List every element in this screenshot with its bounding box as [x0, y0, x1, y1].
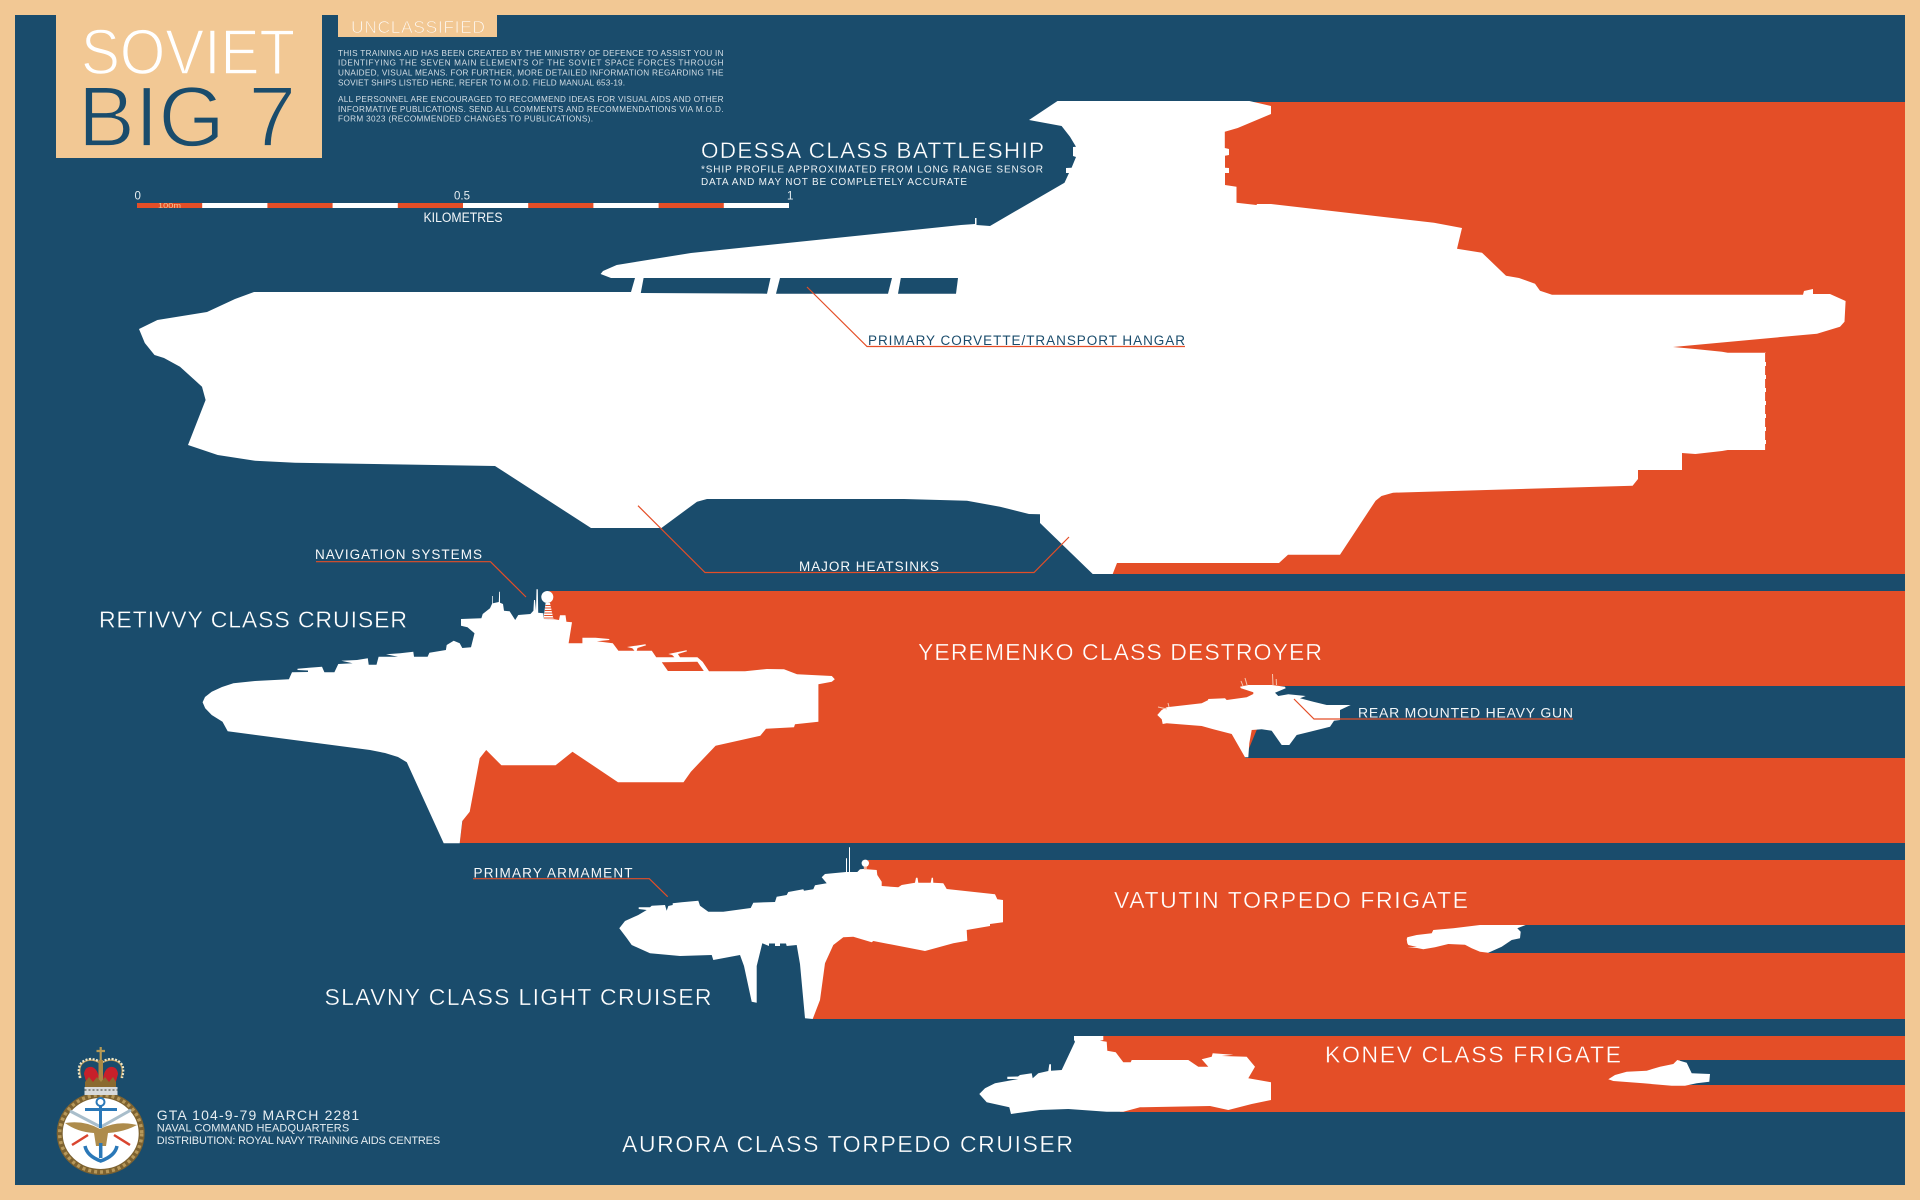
icon: defence crest	[60, 1047, 142, 1172]
text block: intro: UNAIDED, VISUAL MEANS. FOR FURTHER, MORE DETAILED INFORMATION REGARDING THE	[338, 68, 724, 78]
heading: Odessa class battleship: ODESSA CLASS BATTLESHIP	[701, 138, 1044, 163]
ship: Yeremenko class destroyer	[1157, 674, 1351, 757]
text block: document reference: NAVAL COMMAND HEADQUARTERS	[157, 1123, 349, 1135]
callout: primary corvette/transport hangar	[807, 287, 1185, 348]
callout: primary corvette/transport hangar: PRIMARY CORVETTE/TRANSPORT HANGAR	[868, 333, 1185, 348]
callout: primary armament	[473, 866, 668, 897]
panel: navy stripe Yeremenko	[1245, 686, 1905, 758]
heading: Odessa class battleship	[701, 138, 1044, 188]
scale bar: 0.5	[454, 190, 470, 202]
text block: document reference: GTA 104-9-79 MARCH 2281	[157, 1107, 359, 1123]
heading: Yeremenko class destroyer: YEREMENKO CLASS DESTROYER	[918, 639, 1322, 665]
callout: rear mounted heavy gun: REAR MOUNTED HEAVY GUN	[1358, 704, 1573, 720]
ship: Slavny class light cruiser	[619, 847, 1003, 1019]
ship: Vatutin torpedo frigate	[1407, 925, 1526, 953]
ship: Odessa class battleship	[139, 101, 1846, 574]
scale bar	[134, 190, 793, 225]
ship: Aurora class torpedo cruiser	[979, 1036, 1271, 1114]
callout: primary armament: PRIMARY ARMAMENT	[474, 866, 632, 880]
callout: navigation systems	[315, 547, 526, 597]
heading: Aurora class torpedo cruiser: AURORA CLASS TORPEDO CRUISER	[622, 1131, 1073, 1157]
title block: Soviet Big 7	[56, 15, 322, 165]
heading: Odessa class battleship: *SHIP PROFILE APPROXIMATED FROM LONG RANGE SENSOR	[701, 165, 1043, 176]
heading: Retivvy class cruiser: RETIVVY CLASS CRUISER	[99, 607, 407, 633]
panel: orange band Retivvy and Yeremenko	[460, 591, 1905, 843]
text block: intro: FORM 3023 (RECOMMENDED CHANGES TO PUBLICATIONS).	[338, 114, 593, 124]
ship: Konev class frigate	[1608, 1060, 1710, 1086]
text block: intro	[338, 49, 724, 124]
scale bar: 100m	[158, 201, 181, 210]
text block: document reference	[157, 1107, 440, 1147]
panel: orange band Slavny and Vatutin	[813, 860, 1905, 1019]
text block: document reference: DISTRIBUTION: ROYAL NAVY TRAINING AIDS CENTRES	[157, 1135, 440, 1147]
title block: Soviet Big 7: SOVIET	[81, 16, 295, 88]
title block: Soviet Big 7: BIG 7	[78, 70, 296, 165]
callout: rear mounted heavy gun	[1294, 699, 1573, 720]
scale bar: KILOMETRES	[424, 210, 502, 225]
text block: intro: THIS TRAINING AID HAS BEEN CREATED BY THE MINISTRY OF DEFENCE TO ASSIST YOU IN	[338, 49, 724, 58]
callout: major heatsinks: MAJOR HEATSINKS	[799, 559, 939, 574]
text block: intro: ALL PERSONNEL ARE ENCOURAGED TO RECOMMEND IDEAS FOR VISUAL AIDS AND OTHER	[338, 95, 724, 104]
scale bar: 0	[134, 190, 141, 202]
heading: Konev class frigate: KONEV CLASS FRIGATE	[1325, 1042, 1621, 1068]
ship: Retivvy class cruiser	[203, 589, 835, 843]
panel: orange band Aurora and Konev	[1100, 1036, 1905, 1112]
text block: intro: SOVIET SHIPS LISTED HERE, REFER TO M.O.D. FIELD MANUAL 653-19.	[338, 78, 625, 88]
scale bar: 1	[787, 190, 793, 202]
heading: Vatutin torpedo frigate: VATUTIN TORPEDO FRIGATE	[1114, 887, 1468, 913]
text block: intro: INFORMATIVE PUBLICATIONS. SEND ALL COMMENTS AND RECOMMENDATIONS VIA M.O.D.	[338, 105, 724, 114]
callout: navigation systems: NAVIGATION SYSTEMS	[315, 547, 482, 562]
callout: major heatsinks	[638, 506, 1069, 574]
heading: Slavny class light cruiser: SLAVNY CLASS LIGHT CRUISER	[324, 984, 712, 1010]
panel: orange band Odessa	[1110, 102, 1905, 574]
panel: navy stripe Konev	[1680, 1060, 1905, 1085]
panel: navy stripe Vatutin	[1488, 925, 1905, 953]
text block: intro: IDENTIFYING THE SEVEN MAIN ELEMENTS OF THE SOVIET SPACE FORCES THROUGH	[338, 58, 724, 68]
heading: Odessa class battleship: DATA AND MAY NOT BE COMPLETELY ACCURATE	[701, 177, 967, 188]
classification tag: UNCLASSIFIED	[351, 17, 485, 37]
